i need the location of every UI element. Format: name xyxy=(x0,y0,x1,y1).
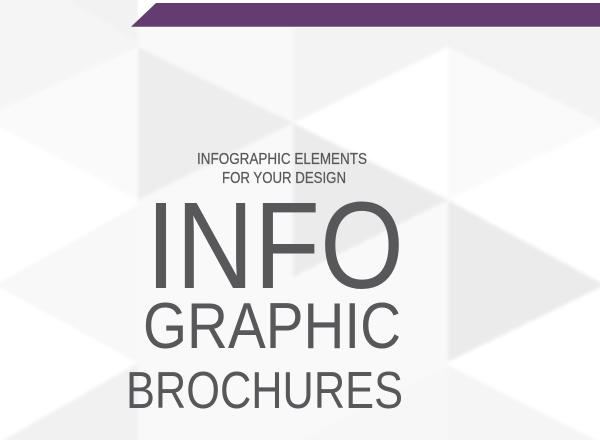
title: BROCHURES: BROCHURES xyxy=(126,362,403,420)
title: GRAPHIC: GRAPHIC xyxy=(143,289,401,362)
top purple banner xyxy=(131,0,600,28)
subtitle: INFOGRAPHIC ELEMENTS xyxy=(197,151,367,168)
subtitle xyxy=(197,151,367,187)
subtitle: FOR YOUR DESIGN xyxy=(222,170,346,187)
title: INFO: INFO xyxy=(146,178,404,315)
